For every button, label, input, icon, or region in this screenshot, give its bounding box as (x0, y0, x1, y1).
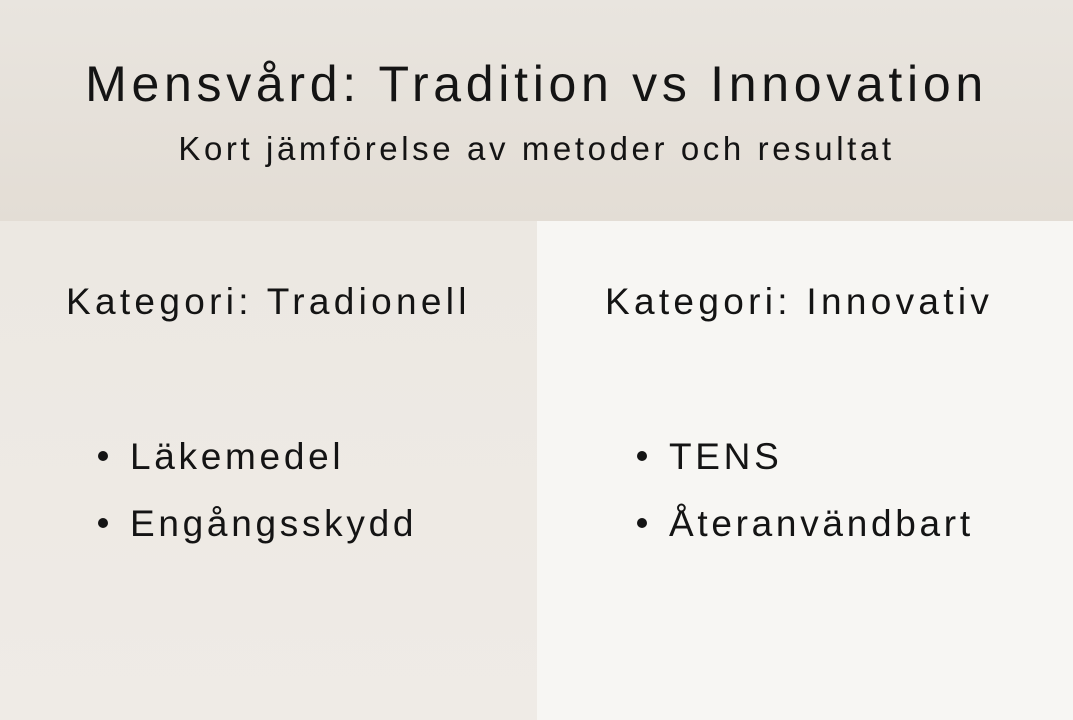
bullet list: traditional: Läkemedel (130, 436, 344, 477)
panel: innovative (537, 221, 1073, 720)
bullet list: traditional (98, 436, 417, 544)
bullet list: innovative (637, 436, 974, 544)
header band (0, 0, 1073, 221)
heading: traditional: Kategori: Tradionell (66, 281, 471, 322)
title: Mensvård: Tradition vs Innovation (85, 56, 988, 112)
subtitle: Kort jämförelse av metoder och resultat (178, 130, 895, 167)
bullet list: traditional: Engångsskydd (130, 503, 417, 544)
bullet list: innovative: TENS (669, 436, 782, 477)
bullet list: innovative: Återanvändbart (669, 503, 974, 544)
panel: traditional (0, 221, 537, 720)
heading: innovative: Kategori: Innovativ (605, 281, 993, 322)
